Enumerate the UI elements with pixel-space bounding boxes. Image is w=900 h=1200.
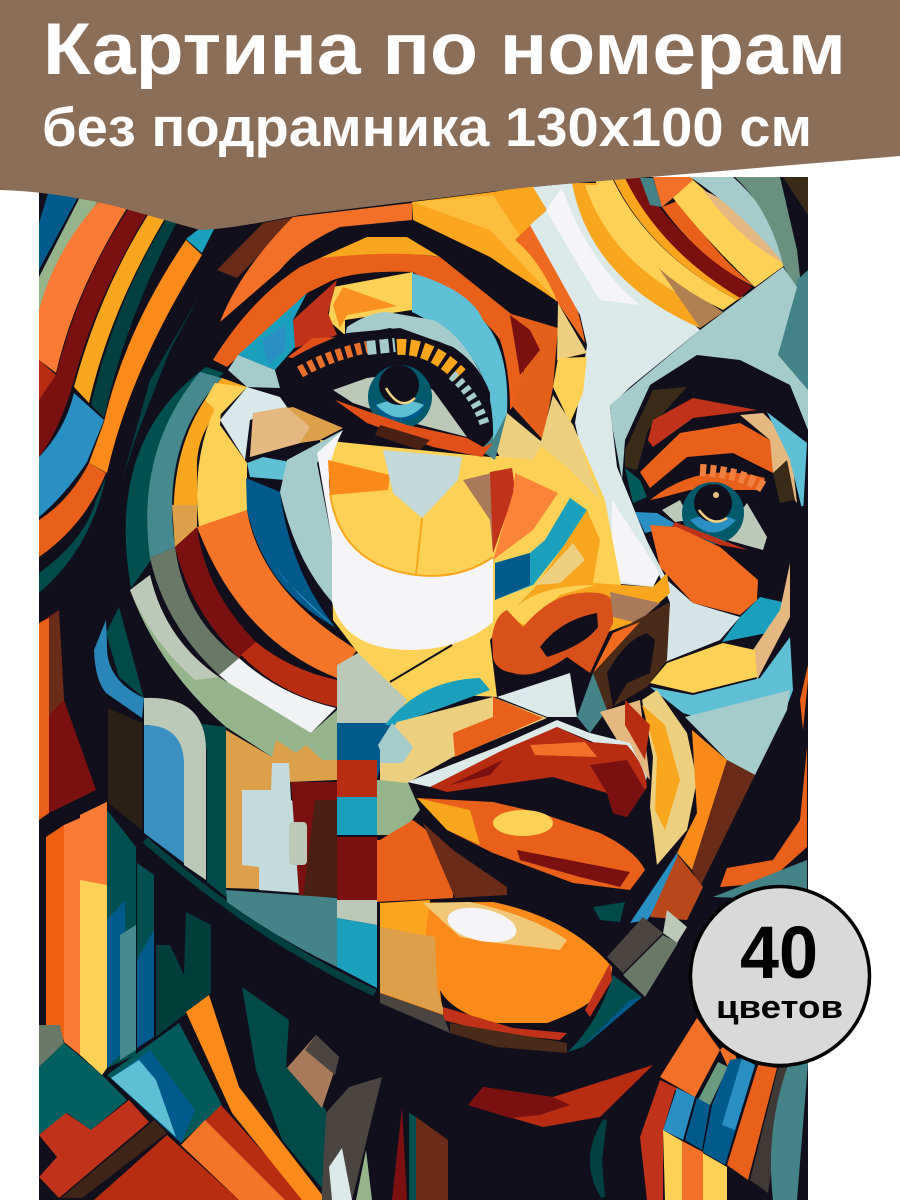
header banner	[0, 0, 900, 230]
neck swoosh and lower right arcs	[468, 1018, 808, 1200]
left eye	[228, 272, 507, 457]
right eye	[625, 387, 808, 615]
right eye socket surround	[610, 267, 808, 480]
white forehead band	[530, 183, 700, 587]
centre face yellow field	[320, 425, 622, 723]
right cheek	[568, 533, 808, 1052]
lips	[407, 720, 647, 890]
painting: abstract cubist portrait	[39, 177, 808, 1200]
badge: 40 colours: 40	[740, 911, 818, 994]
chin	[380, 900, 612, 1053]
left cheek rings	[126, 367, 357, 760]
right of left eye patches	[480, 303, 600, 500]
top right arcs	[572, 177, 808, 400]
cheek tiles	[220, 387, 600, 682]
badge: 40 colours	[690, 886, 870, 1066]
badge: 40 colours: цветов	[716, 989, 843, 1025]
lower left panels and arch	[39, 607, 507, 993]
subtitle: без подрамника 130х100 см	[42, 96, 812, 158]
title: Картина по номерам	[43, 9, 846, 90]
forehead arcs	[213, 185, 585, 410]
nose	[380, 573, 670, 783]
left lower stripes	[39, 802, 448, 1200]
left hair stripes	[39, 190, 295, 593]
